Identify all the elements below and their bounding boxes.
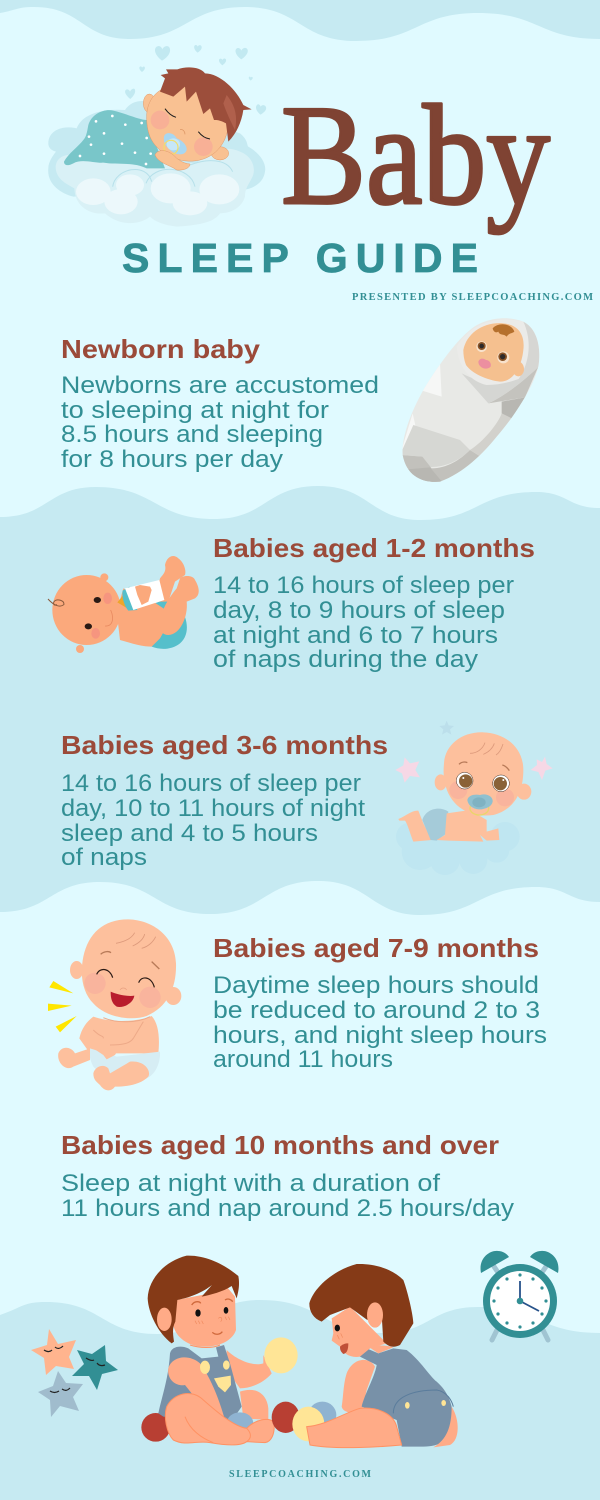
section: babies aged 1-2 months [213,533,535,673]
text: 10 months description: 11 hours and nap around 2.5 hours/day [61,1195,514,1222]
yellow rays [48,981,77,1032]
section: newborn baby [61,334,379,473]
text: 7-9 months description: be reduced to around 2 to 3 [213,997,540,1024]
heading: newborn baby: Newborn baby [61,334,261,364]
text: 3-6 months description: 14 to 16 hours of sleep per [61,770,361,797]
child right [272,1264,458,1448]
title: Baby: Baby [281,76,550,234]
text: 7-9 months description: around 11 hours [213,1046,393,1073]
illustration: sleepy stars [31,1329,118,1417]
subtitle: Sleep Guide: SLEEP GUIDE [122,235,478,281]
text: 1-2 months description: day, 8 to 9 hours of sleep [213,597,505,624]
stars [395,721,553,783]
text: 7-9 months description: hours, and night sleep hours [213,1022,547,1049]
text: 10 months description: Sleep at night with a duration of [61,1170,440,1197]
text: newborn description [61,372,379,473]
illustration: baby with bottle [48,556,199,653]
text: 7-9 months description: Daytime sleep hours should [213,972,539,999]
child left [141,1256,298,1445]
text: 3-6 months description: of naps [61,844,147,871]
section: babies aged 3-6 months [61,730,388,871]
text: 3-6 months description: sleep and 4 to 5 hours [61,820,318,847]
text: newborn description: 8.5 hours and sleeping [61,421,323,448]
section: babies aged 10 months and over [61,1130,514,1222]
text: 3-6 months description: day, 10 to 11 hours of night [61,795,365,822]
icon: alarm clock [481,1251,558,1340]
illustration: children playing [141,1256,458,1448]
illustration: laughing baby [48,919,181,1090]
presented by credit: PRESENTED BY SLEEPCOACHING.COM [352,292,593,303]
illustration: baby with pacifier on cloud [395,721,553,875]
cloud [396,822,520,875]
baby head [143,67,252,161]
text: 7-9 months description [213,972,547,1073]
cloud [48,101,265,227]
heading: 1-2 months: Babies aged 1-2 months [213,533,535,563]
text: 1-2 months description: of naps during the day [213,646,478,673]
text: 1-2 months description: at night and 6 to 7 hours [213,622,498,649]
illustration: swaddled newborn [400,318,539,487]
pacifier and hand [155,133,190,170]
text: newborn description: to sleeping at night for [61,397,329,424]
footer credit: SLEEPCOACHING.COM [229,1469,372,1480]
heading: 10 months and over: Babies aged 10 months and over [61,1130,499,1160]
text: 10 months description [61,1170,514,1222]
baby body [64,110,165,168]
section: babies aged 7-9 months [213,933,547,1073]
text: newborn description: Newborns are accustomed [61,372,379,399]
text: 1-2 months description [213,572,514,673]
text: newborn description: for 8 hours per day [61,446,283,473]
text: 3-6 months description [61,770,365,871]
hearts [125,45,266,115]
illustration: sleeping baby on cloud [48,45,266,227]
text: 1-2 months description: 14 to 16 hours of sleep per [213,572,514,599]
heading: 3-6 months: Babies aged 3-6 months [61,730,388,760]
heading: 7-9 months: Babies aged 7-9 months [213,933,539,963]
